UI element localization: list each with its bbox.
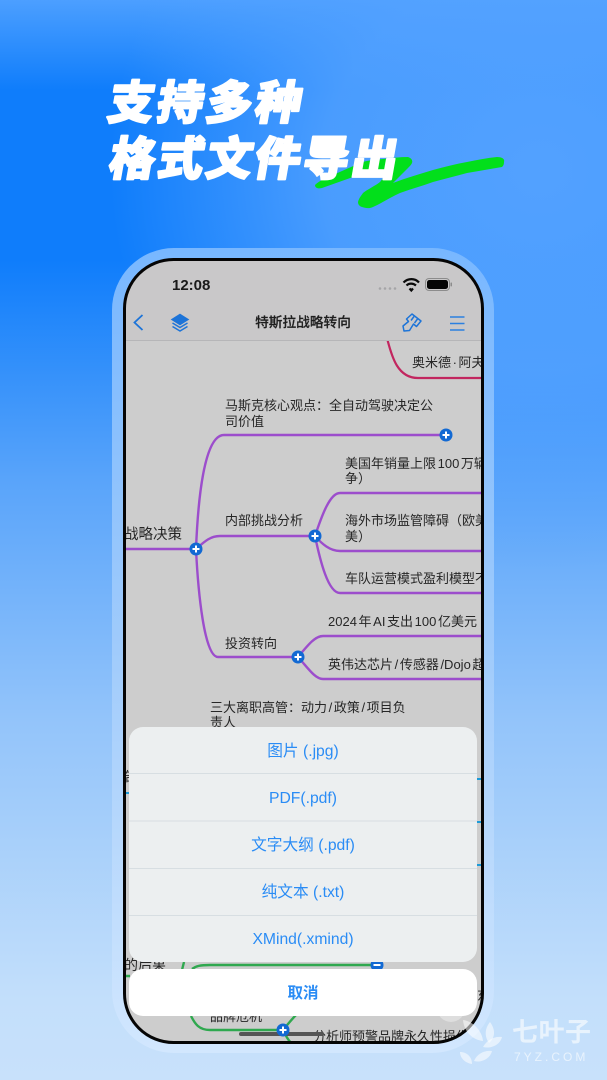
sheet options: 文字大纲 (.pdf) xyxy=(251,836,355,854)
mind map labels: 英伟达芯片 / 传感器 /Dojo 超 xyxy=(328,657,485,672)
sheet options xyxy=(251,742,355,948)
lower labels: 品牌危机 xyxy=(210,1009,262,1024)
mind map labels: 司价值 xyxy=(225,414,264,429)
icon: battery xyxy=(426,278,452,290)
phone outer frame xyxy=(112,248,494,1053)
mind map labels: 马斯克核心观点：全自动驾驶决定公 xyxy=(225,398,433,413)
mind map labels: 海外市场监管障碍（欧美 xyxy=(345,513,488,528)
icon: back chevron xyxy=(134,315,142,330)
mind map xyxy=(124,338,488,730)
title: 格式文件导出 xyxy=(105,133,405,185)
sheet options: 图片 (.jpg) xyxy=(267,742,339,760)
mind map labels: 投资转向 xyxy=(225,636,277,651)
lower labels xyxy=(124,769,490,1044)
lower labels: 告 xyxy=(124,769,137,784)
sheet options: 纯文本 (.txt) xyxy=(262,883,344,901)
watermark xyxy=(460,1017,592,1064)
navigation bar xyxy=(126,278,481,341)
mind map labels: 战略决策 xyxy=(124,526,182,543)
green branches xyxy=(126,962,371,1041)
mind map labels: 美国年销量上限 100 万辆 xyxy=(345,456,487,471)
cancel button: 取消 xyxy=(287,984,319,1002)
watermark text: 7YZ.COM xyxy=(514,1050,588,1064)
status time: 12:08 xyxy=(172,277,210,294)
lower labels: 东 xyxy=(477,988,490,1003)
sheet options: PDF(.pdf) xyxy=(269,790,337,807)
red branch xyxy=(387,338,482,378)
icon: leaves xyxy=(460,1020,502,1064)
green nodes xyxy=(370,962,384,969)
mind map labels: 责人 xyxy=(210,715,236,730)
mind map labels: 美） xyxy=(345,529,371,544)
floating button xyxy=(440,1016,462,1022)
cancel button xyxy=(129,969,477,1016)
watermark text: 七叶子 xyxy=(512,1017,592,1047)
icon: wifi xyxy=(404,279,419,290)
title xyxy=(104,77,405,185)
mind map labels xyxy=(124,355,488,730)
title: 支持多种 xyxy=(104,77,309,129)
phone mockup xyxy=(112,248,494,1053)
mind map labels: 奥米德 · 阿夫 xyxy=(412,355,485,370)
mind map labels: 车队运营模式盈利模型不 xyxy=(345,571,488,586)
phone screen background xyxy=(125,260,482,1042)
mind map labels: 三大离职高管：动力 / 政策 / 项目负 xyxy=(210,700,406,715)
lower mind map xyxy=(124,769,490,1044)
lower labels: 分析师预警品牌永久性损伤 xyxy=(313,1029,469,1044)
watermark text xyxy=(512,1017,592,1064)
edge fragments xyxy=(125,779,483,865)
icon: layers xyxy=(172,314,188,331)
purple branches xyxy=(125,435,482,679)
icon: brush xyxy=(403,314,421,331)
sheet options: XMind(.xmind) xyxy=(252,931,354,948)
sheet dividers xyxy=(129,774,477,916)
mind map labels: 内部挑战分析 xyxy=(225,513,303,528)
nav title: 特斯拉战略转向 xyxy=(255,314,351,330)
icon: menu xyxy=(450,317,464,330)
phone bezel xyxy=(124,260,482,1042)
status dots xyxy=(379,287,396,290)
expand nodes xyxy=(190,428,452,664)
home indicator xyxy=(239,1032,324,1036)
mind map labels: 2024 年 AI 支出 100 亿美元 xyxy=(328,614,477,629)
green brush stroke xyxy=(315,157,504,208)
lower labels: 的后果 xyxy=(124,957,166,973)
export sheet xyxy=(129,727,477,962)
mind map labels: 争） xyxy=(345,471,371,486)
